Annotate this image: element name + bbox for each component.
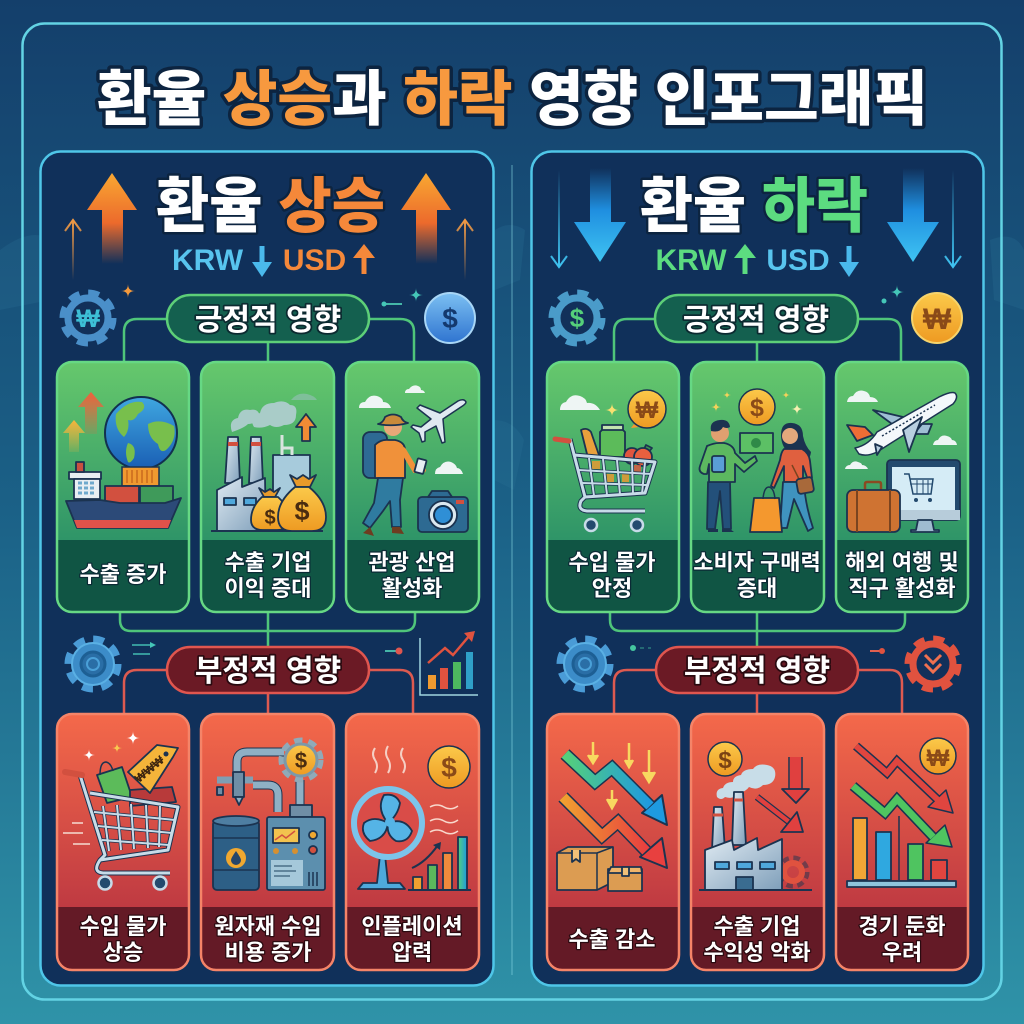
decorative dashes — [132, 642, 402, 654]
pill: positive effects: 긍정적 영향 — [683, 304, 829, 337]
label: 활성화 — [382, 576, 442, 601]
decorative sparks — [882, 285, 904, 304]
icon: factory with falling arrows — [699, 742, 812, 890]
center divider — [511, 165, 513, 975]
icon: bars, falling arrows, won coin — [847, 738, 956, 887]
card: purchasing power — [691, 362, 824, 612]
icon: red gear with chevrons — [909, 640, 957, 688]
label — [368, 550, 456, 601]
icon: won coin — [912, 293, 962, 343]
label: 소비자 구매력 — [693, 550, 821, 575]
label — [214, 914, 322, 965]
pill: negative effects: 부정적 영향 — [684, 655, 830, 688]
label: 원자재 수입 — [214, 914, 322, 939]
main title: 환율 상승과 하락 영향 인포그래픽 — [97, 66, 928, 133]
icon: grocery cart with won bubble: ₩ — [636, 397, 659, 424]
label — [568, 550, 656, 601]
icon: dollar gear: $ — [570, 303, 585, 333]
icon: blue gear — [561, 640, 609, 688]
decorative dots — [630, 645, 885, 654]
icon: factory and money bags: $ — [294, 496, 310, 526]
icon: dollar coin — [425, 293, 475, 343]
currency line KRW up USD down — [655, 244, 859, 277]
pill: positive effects — [167, 295, 369, 342]
card: overseas travel — [836, 362, 968, 612]
label: 수입 물가 — [79, 914, 167, 939]
label: 비용 증가 — [224, 940, 312, 965]
panel: exchange rate fall — [532, 152, 984, 986]
connectors: positive — [120, 319, 415, 647]
currency line KRW down USD up — [172, 244, 375, 277]
icon: dollar coin: $ — [442, 303, 458, 334]
thin down arrows — [551, 170, 961, 267]
card: export decrease — [547, 714, 679, 970]
label: 우려 — [882, 940, 922, 965]
label: 해외 여행 및 — [845, 550, 959, 575]
icon: plane, suitcase, monitor — [845, 391, 960, 532]
card: tourism — [346, 362, 479, 612]
label — [693, 550, 821, 601]
card: inflation — [346, 714, 479, 970]
icon: bars, falling arrows, won coin: ₩ — [927, 745, 950, 772]
label — [224, 550, 312, 601]
label — [361, 914, 463, 965]
label: 이익 증대 — [224, 576, 312, 601]
icon: shoppers with money: $ — [750, 394, 764, 422]
card: import prices rise — [57, 714, 189, 970]
icon: falling arrows and boxes — [557, 742, 667, 891]
world map backdrop — [0, 225, 1024, 490]
icon: dollar gear — [553, 294, 601, 342]
label: 수출 기업 — [224, 550, 312, 575]
icon: rising chart — [420, 631, 478, 695]
currency line KRW up USD down: USD — [766, 244, 830, 277]
connectors: positive — [610, 319, 905, 647]
big down arrows — [574, 168, 939, 262]
icon: won gear: ₩ — [76, 305, 100, 333]
pill: negative effects — [656, 647, 858, 693]
card: import price stable — [547, 362, 679, 612]
icon: factory and money bags: $ — [264, 507, 276, 529]
thin up arrows — [65, 220, 473, 280]
decorative sparks — [121, 284, 423, 306]
icon: grocery cart with won bubble — [555, 390, 666, 531]
card: raw material cost — [201, 714, 334, 970]
label: 수입 물가 — [568, 550, 656, 575]
card: export increase — [57, 362, 189, 612]
pill: negative effects — [167, 647, 369, 693]
heading: rise: 환율 상승 — [156, 173, 385, 240]
currency line KRW down USD up: USD — [283, 244, 346, 277]
icon: won coin: ₩ — [923, 303, 952, 336]
icon: won gear — [64, 294, 112, 342]
label: 수출 감소 — [568, 927, 656, 952]
icon: traveler, plane, camera — [359, 385, 468, 536]
label: 수출 기업 — [713, 914, 801, 939]
label: 관광 산업 — [368, 550, 456, 575]
label: 경기 둔화 — [858, 914, 946, 939]
icon: ship and globe — [63, 392, 181, 528]
label: 직구 활성화 — [848, 576, 956, 601]
card: exporter profitability — [691, 714, 824, 970]
icon: factory and money bags — [211, 394, 326, 531]
label: 인플레이션 — [361, 914, 463, 939]
label: 압력 — [392, 940, 432, 965]
pill: positive effects: 긍정적 영향 — [195, 304, 341, 337]
big up arrows — [87, 173, 451, 264]
panel: exchange rate rise — [40, 152, 494, 986]
label — [79, 914, 167, 965]
icon: shopping cart with price tag: ₩₩₩ — [132, 753, 167, 786]
label: 안정 — [592, 576, 632, 601]
icon: oil barrel, pipes, machine — [213, 741, 325, 890]
connectors: negative — [614, 670, 902, 714]
icon: oil barrel, pipes, machine: $ — [295, 748, 307, 773]
heading: fall: 환율 하락 — [640, 173, 868, 240]
label: 수익성 악화 — [703, 940, 811, 965]
label: 상승 — [103, 940, 143, 965]
label: 증대 — [737, 576, 777, 601]
label — [845, 550, 959, 601]
icon: shopping cart with price tag — [63, 731, 178, 890]
card: economic slowdown — [836, 714, 968, 970]
label: 수출 증가 — [79, 562, 167, 587]
card: exporter profit — [201, 362, 334, 612]
label — [703, 914, 811, 965]
currency line KRW up USD down: KRW — [655, 244, 727, 277]
icon: blue gear — [69, 640, 117, 688]
icon: fan, coin, bar chart: $ — [441, 752, 457, 783]
connectors: negative — [124, 670, 413, 714]
icon: fan, coin, bar chart — [354, 746, 471, 890]
currency line KRW down USD up: KRW — [172, 244, 244, 277]
icon: shoppers with money — [700, 389, 814, 532]
label — [858, 914, 946, 965]
icon: factory with falling arrows: $ — [718, 747, 732, 774]
pill: negative effects: 부정적 영향 — [195, 655, 341, 688]
pill: positive effects — [655, 295, 858, 342]
